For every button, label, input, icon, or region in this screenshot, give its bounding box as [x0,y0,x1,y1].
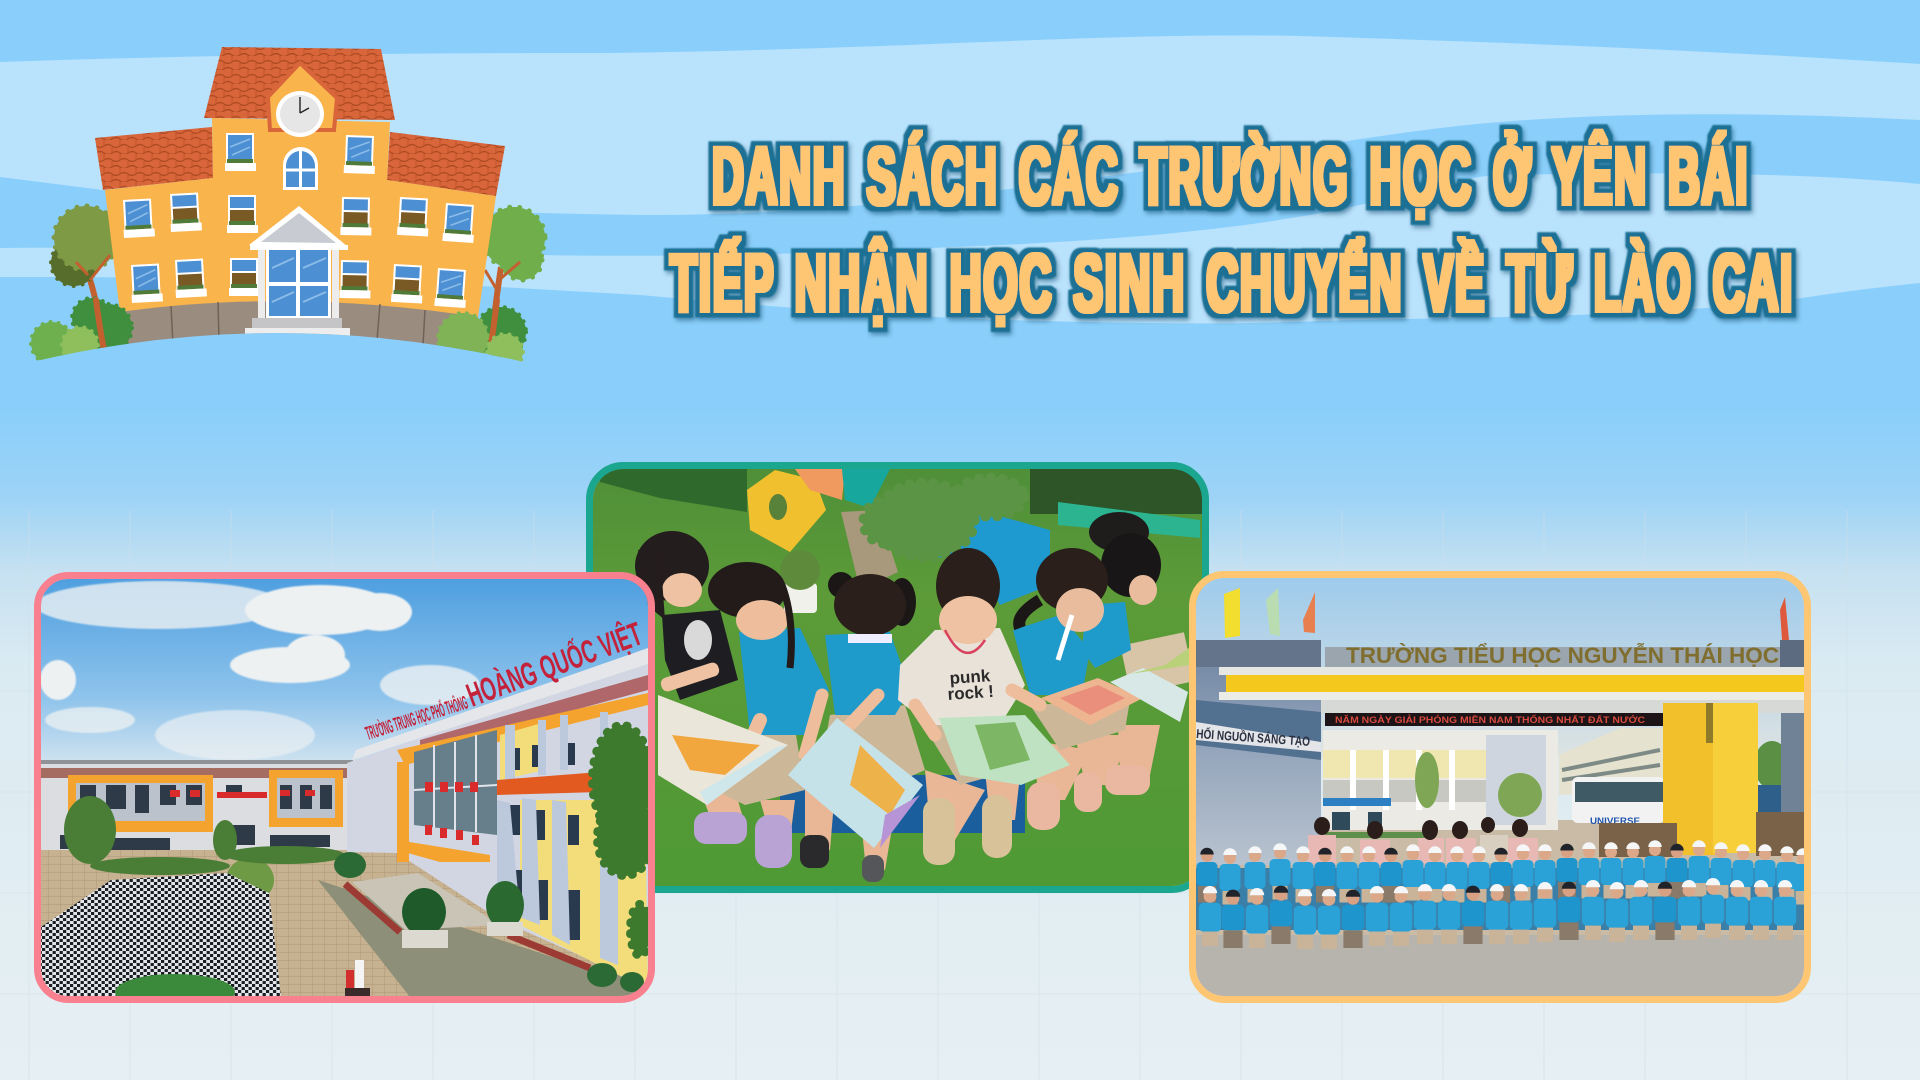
blue child behind [905,516,1050,605]
back roof [204,47,395,120]
child 1: blue shirt [708,562,829,765]
child 2: blue shirt [825,572,916,730]
plaza concrete [318,880,648,997]
dark grass corner [600,469,747,512]
LED sign [1325,713,1663,726]
fences [1599,812,1804,857]
clock gable [268,63,337,130]
school sign, large part: HOÀNG QUỐC VIỆT [461,614,647,714]
porch [249,206,348,320]
child 4: blue shirt [1013,548,1108,695]
students front row [1199,878,1796,949]
background grid [0,510,1920,1080]
grass [593,469,1202,886]
tower windows [225,133,376,174]
shirt print: punk [949,666,991,688]
legs [700,725,1160,870]
back building [1323,730,1558,838]
seat [780,775,1025,833]
wing windows [1562,750,1660,780]
photo panel: Hoàng Quốc Việt school (pink frame): TRƯỜNG TRUNG HỌC PHỔ THÔNG [363,692,471,745]
trees along building [64,796,345,902]
tree trunk [841,510,898,578]
gate underside [1320,700,1804,713]
left building [41,760,353,850]
stone base [120,301,478,350]
stage [352,873,500,930]
plant [863,477,1025,558]
photo panel: Nguyễn Thái Học school (yellow frame) [1192,574,1814,1000]
bus [1572,777,1665,826]
play structure [747,469,890,552]
left tree [51,206,118,350]
left wing roof [95,127,213,190]
clouds [35,581,480,760]
clock [276,91,324,137]
teachers [1308,817,1538,866]
bus: UNIVERSE [1590,816,1640,826]
teal frame [590,466,1206,890]
upper windows [122,192,476,243]
right wing roof [387,132,505,196]
right tree [484,204,548,309]
right building [347,648,648,990]
small group [345,960,370,997]
yellow pillars [1663,703,1758,855]
base joints [171,302,425,345]
LED sign: NĂM NGÀY GIẢI PHÓNG MIỀN NAM THỐNG NHẤT ĐẤT NƯỚC [1335,714,1646,725]
shoes [694,765,1150,882]
distant tree and dark bus [1754,741,1790,825]
background wave bands [0,35,1920,323]
books [658,640,1200,848]
road [1196,935,1804,997]
sky [41,579,648,779]
students fill band [1196,868,1804,930]
left wall [1196,640,1321,865]
courtyard bushes [334,852,644,992]
yellow frame [1192,574,1808,1000]
gate sign: TRƯỜNG TIỂU HỌC NGUYỄN THÁI HỌC [1346,642,1779,668]
door [266,247,331,319]
steps [245,318,350,336]
building body [105,118,496,317]
white pot and plant [780,550,820,613]
students back row [1196,840,1814,904]
lower windows [130,258,468,308]
bushes [31,298,526,370]
child 0: black shirt [635,531,738,700]
back heads [1089,512,1149,552]
sky [1196,578,1804,758]
child 5: far right [1082,533,1161,668]
photo panel: children reading (teal frame) [590,466,1206,890]
right foreground tree [592,725,653,956]
foreground plants [115,974,235,1010]
gate canopy [1219,640,1804,700]
gate railing [1325,647,1780,667]
title [670,130,1794,329]
illustration: school building [31,47,545,370]
teal fence [1058,502,1200,538]
right gray pillar [1781,710,1804,830]
schoolyard ground [1196,820,1804,940]
photo panel: Hoàng Quốc Việt school (pink frame) [35,576,653,1010]
red steps [345,884,590,968]
right wing building [1559,728,1663,795]
child 3: white shirt [898,548,1040,735]
left wall: HỐI NGUỒN SÁNG TẠO [1196,726,1311,749]
skirts [715,632,1194,805]
hedge [1030,469,1202,514]
student crowd [41,873,281,997]
child 3: white shirt: rock ! [947,682,994,704]
arched window [283,147,318,190]
flags [1224,588,1789,640]
paved courtyard [41,845,648,997]
pink frame [38,576,652,1000]
